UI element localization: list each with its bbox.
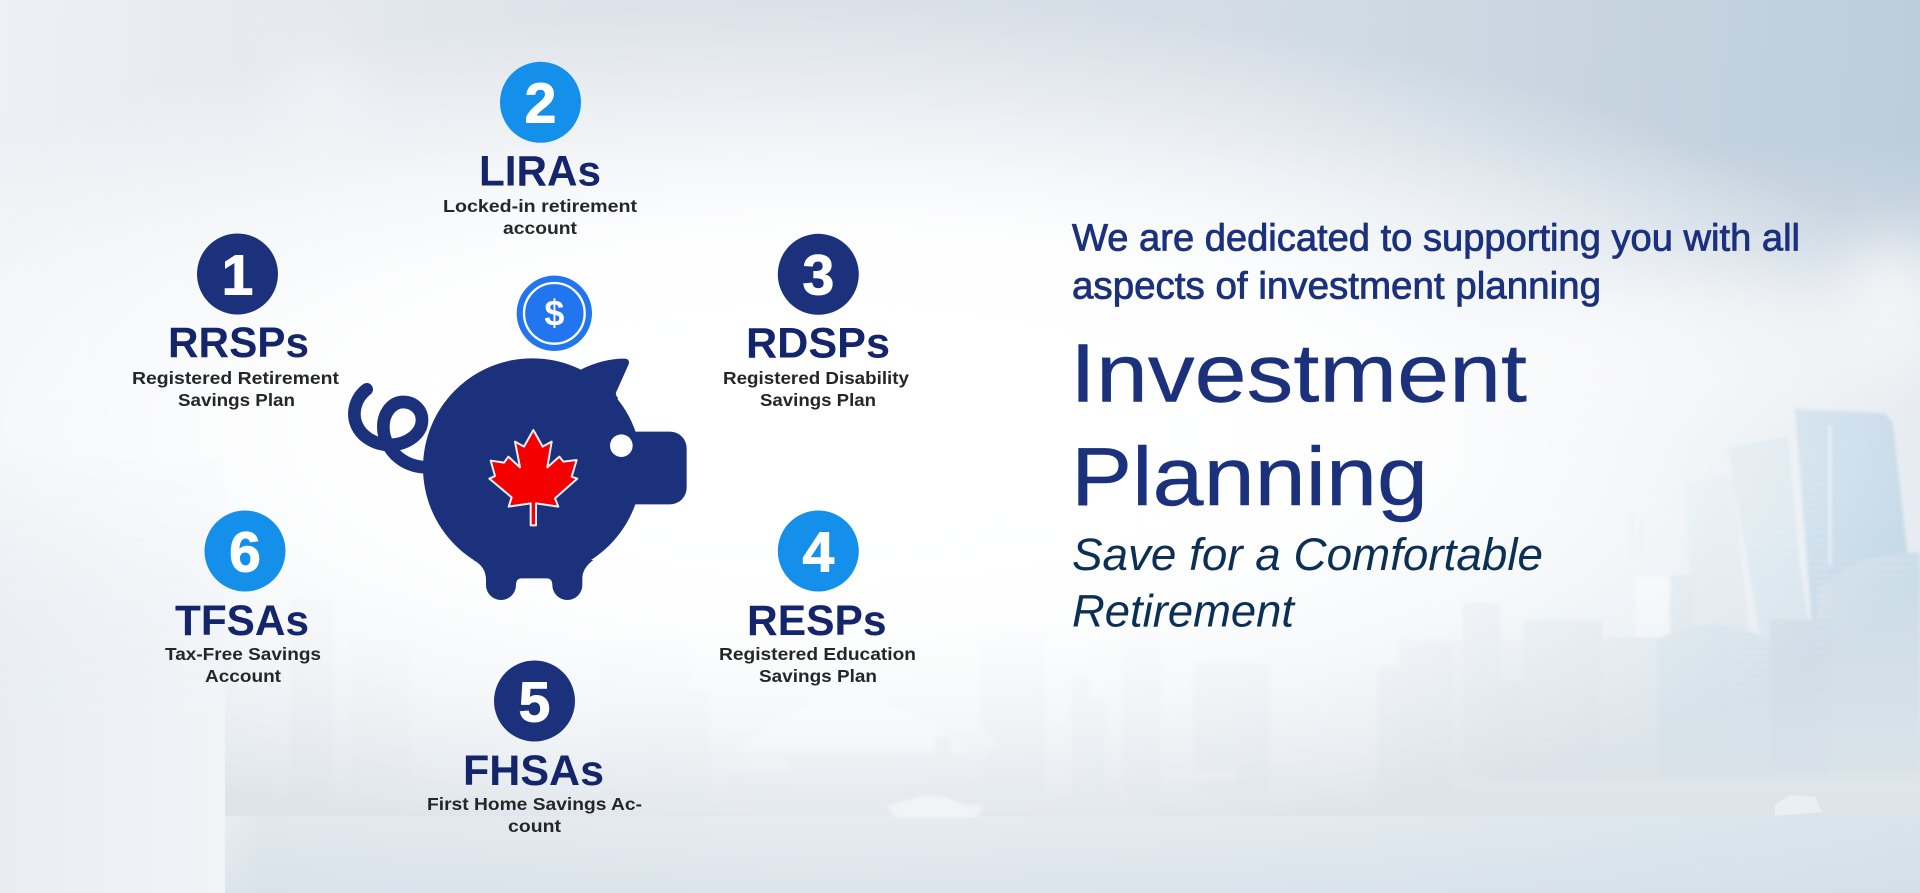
item 3: RDSPs: Registered Disability: [723, 368, 909, 388]
icon: dollar coin: $: [544, 293, 564, 334]
item 3: RDSPs: Savings Plan: [760, 390, 876, 410]
intro text: We are dedicated to supporting you with all: [1072, 218, 1800, 260]
icon: red maple leaf: [489, 430, 577, 525]
intro text: [1072, 218, 1800, 308]
panel: account types diagram: [132, 62, 916, 836]
item 4: RESPs: 4: [802, 520, 834, 584]
item 5: FHSAs: [427, 660, 642, 836]
item 6: TFSAs: Account: [205, 666, 281, 686]
item 2: LIRAs: account: [503, 218, 577, 238]
item 1: RRSPs: 1: [222, 244, 253, 308]
title: Planning: [1071, 430, 1428, 523]
item 4: RESPs: Registered Education: [719, 644, 916, 664]
intro text: aspects of investment planning: [1072, 266, 1601, 308]
title: [1070, 327, 1527, 523]
stadium dome: [700, 676, 996, 803]
icon: pig eye: [610, 434, 633, 457]
item 6: TFSAs: 6: [229, 520, 261, 584]
item 3: RDSPs: RDSPs: [746, 320, 890, 368]
item 4: RESPs: [719, 510, 916, 686]
item 5: FHSAs: First Home Savings Ac-: [427, 794, 642, 814]
item 5: FHSAs: FHSAs: [463, 748, 604, 795]
item 2: LIRAs: [443, 62, 637, 238]
icon: piggy bank with maple leaf and coin: [354, 276, 687, 600]
item 4: RESPs: RESPs: [747, 598, 886, 645]
item 2: LIRAs: 2: [525, 72, 556, 136]
subtitle: Save for a Comfortable: [1072, 529, 1543, 580]
water: [225, 816, 1920, 893]
item 3: RDSPs: [723, 234, 909, 410]
item 1: RRSPs: Savings Plan: [178, 390, 295, 410]
item 2: LIRAs: Locked-in retirement: [443, 196, 637, 216]
item 3: RDSPs: 3: [802, 244, 834, 308]
panel: headline text: [1070, 218, 1800, 636]
icon: dollar coin: [517, 276, 592, 351]
item 5: FHSAs: 5: [519, 670, 550, 734]
item 1: RRSPs: Registered Retirement: [132, 368, 339, 388]
boat: [887, 795, 984, 817]
item 5: FHSAs: count: [508, 816, 561, 836]
item 4: RESPs: Savings Plan: [759, 666, 877, 686]
subtitle: [1072, 529, 1543, 636]
item 6: TFSAs: Tax-Free Savings: [165, 644, 321, 664]
building: tall glass tower: [1795, 409, 1907, 640]
item 6: TFSAs: TFSAs: [175, 598, 309, 645]
subtitle: Retirement: [1072, 586, 1297, 636]
item 1: RRSPs: RRSPs: [168, 320, 309, 367]
item 1: RRSPs: [132, 234, 339, 410]
icon: pig tail: [354, 389, 427, 467]
item 2: LIRAs: LIRAs: [479, 149, 601, 196]
icon: pig body: [423, 358, 687, 600]
title: Investment: [1070, 327, 1527, 420]
item 6: TFSAs: [165, 510, 321, 686]
